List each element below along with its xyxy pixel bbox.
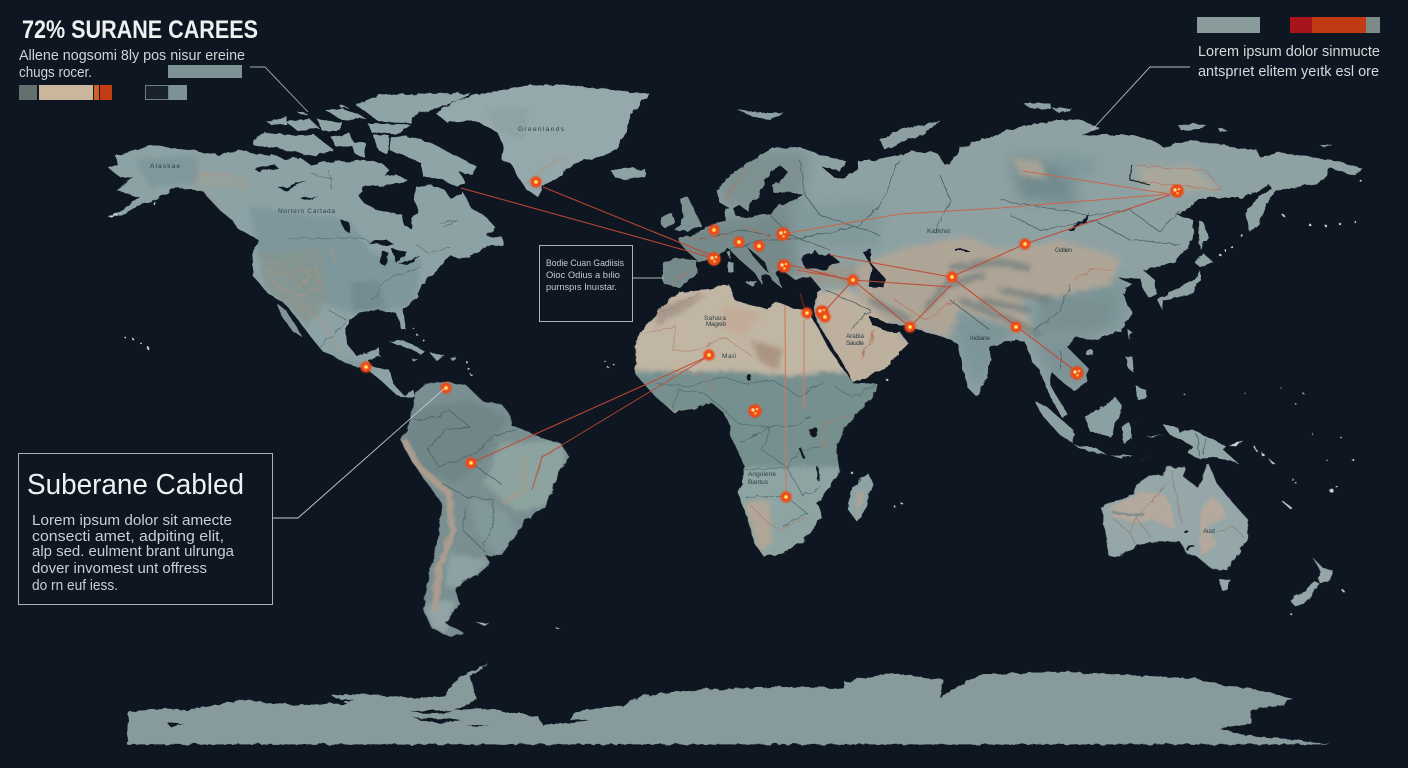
Philippines bbox=[1126, 356, 1148, 400]
leader line: note bbox=[1092, 67, 1190, 130]
map micro labels: Indiane bbox=[970, 335, 990, 342]
hotspot: Balkans bbox=[776, 258, 792, 274]
Aral and Baikal lakes bbox=[955, 165, 1150, 250]
Kuril and Aleutian chains bbox=[1219, 179, 1361, 256]
Madagascar bbox=[848, 474, 873, 522]
hotspot: Central America bbox=[360, 360, 372, 374]
hotspot: Greenland bbox=[530, 176, 542, 188]
hotspot: Siberia bbox=[1170, 184, 1184, 198]
large callout panel bbox=[18, 388, 445, 604]
Atlantic and Indian islets bbox=[556, 361, 903, 629]
panel body text: do rn euf iess. bbox=[32, 578, 118, 594]
map micro labels: Greenlands bbox=[518, 126, 565, 133]
hotspot: Mongolia bbox=[1018, 238, 1032, 250]
hotspot: France bbox=[708, 224, 720, 236]
Falkland islands bbox=[476, 622, 488, 625]
note text: antsprıet elitem yeıtk esl ore bbox=[1198, 64, 1379, 80]
landmasses bbox=[100, 84, 1370, 744]
British Isles bbox=[660, 197, 702, 232]
hotspot: Caucasus bbox=[846, 274, 860, 286]
callout text bbox=[546, 258, 624, 293]
map micro labels: Aust bbox=[1203, 528, 1215, 535]
legend swatch: grey bbox=[1197, 17, 1260, 33]
map micro labels: Alaskae bbox=[150, 163, 180, 170]
map micro labels: Nortern Cartada bbox=[278, 208, 335, 215]
legend swatch: outlined pair bbox=[146, 85, 187, 100]
subtitle: chugs rocer. bbox=[19, 65, 92, 81]
Eurasia mainland bbox=[650, 110, 1370, 430]
Oceania and Indonesia bbox=[1035, 388, 1354, 616]
small callout box bbox=[540, 246, 664, 322]
legend bar: stacked share bbox=[19, 85, 112, 100]
connection routes bbox=[461, 171, 1170, 497]
Caspian Sea bbox=[863, 250, 885, 288]
hotspot: Switzerland bbox=[732, 236, 746, 248]
Indonesian islands bbox=[1035, 397, 1163, 462]
South America bbox=[400, 381, 570, 638]
subtitle: Allene nogsomi 8ly pos nisur ereine bbox=[19, 48, 245, 64]
map micro labels: Mali bbox=[722, 353, 736, 360]
note text bbox=[1198, 44, 1380, 80]
hotspot: Gulf bbox=[904, 320, 916, 334]
hotspot: Austria bbox=[752, 240, 766, 252]
title: 72% SURANE CAREES bbox=[22, 16, 258, 44]
panel body text bbox=[32, 513, 235, 594]
Greenland bbox=[436, 84, 650, 197]
callout text: Bodie Cuan Gadiisis bbox=[546, 258, 624, 269]
map micro labels: Bantus bbox=[748, 479, 769, 486]
map micro labels: Saudie bbox=[846, 340, 864, 347]
legend swatch: grey bar bbox=[168, 65, 242, 78]
map micro labels: Magreb bbox=[706, 321, 726, 328]
Australia bbox=[1100, 464, 1248, 571]
Northern islands bbox=[737, 103, 1332, 150]
Caribbean islands bbox=[389, 340, 456, 360]
incident hotspots bbox=[360, 176, 1184, 504]
legend bar: red share bbox=[1290, 17, 1380, 33]
map micro labels: Sahara bbox=[704, 315, 726, 322]
callout frame bbox=[540, 246, 632, 322]
Mediterranean islands bbox=[727, 252, 758, 287]
hotspot: Arabia north two bbox=[818, 310, 832, 324]
map micro labels: Gobien bbox=[1055, 247, 1072, 254]
panel body text: dover invomest unt offress bbox=[32, 561, 207, 577]
hotspot: Venezuela bbox=[440, 382, 452, 394]
hotspot: Brazil bbox=[464, 456, 478, 470]
hotspot: Sahel bbox=[702, 348, 716, 362]
North America mainland bbox=[108, 145, 504, 398]
hotspot: Central Africa bbox=[748, 404, 762, 418]
small islets bbox=[107, 201, 472, 376]
Eurasia bbox=[650, 103, 1370, 430]
subtitle bbox=[19, 48, 245, 81]
note text: Lorem ipsum dolor sinmucte bbox=[1198, 44, 1380, 60]
panel body text: consecti amet, adpiting elit, bbox=[32, 529, 224, 545]
Antarctica bbox=[127, 663, 1331, 744]
leader line: callout bbox=[632, 277, 664, 279]
New Guinea bbox=[1163, 425, 1238, 463]
hotspot: Vietnam bbox=[1070, 366, 1084, 380]
callout text: Oioc Odius a bılio bbox=[546, 270, 620, 281]
Baja California bbox=[277, 303, 302, 337]
panel body text: Lorem ipsum dolor sit amecte bbox=[32, 513, 232, 529]
panel heading: Suberane Cabled bbox=[27, 469, 244, 501]
Iceland bbox=[611, 168, 646, 180]
Taiwan and Hainan bbox=[1085, 330, 1132, 356]
North America and Greenland bbox=[100, 84, 650, 407]
hotspot: Sinai bbox=[800, 306, 814, 320]
Japan and Sakhalin bbox=[1157, 220, 1213, 310]
leader line: panel bbox=[272, 388, 445, 518]
map micro labels: Kazkhst bbox=[927, 228, 950, 235]
Africa bbox=[634, 284, 878, 556]
hotspot: Riviera bbox=[706, 252, 722, 266]
panel frame bbox=[18, 454, 272, 604]
South America and Africa bbox=[380, 280, 903, 643]
leader line: title bbox=[250, 67, 308, 112]
map micro labels: Arabia bbox=[846, 333, 864, 340]
title block bbox=[19, 16, 308, 112]
Tasmania bbox=[1218, 578, 1231, 590]
hotspot: Tian Shan bbox=[946, 270, 958, 284]
map micro labels: Angolene bbox=[748, 471, 776, 478]
Black Sea bbox=[800, 250, 840, 270]
New Zealand bbox=[1291, 558, 1333, 606]
hotspot: Southern Africa bbox=[780, 490, 792, 504]
hotspot: Ukraine bbox=[776, 226, 790, 242]
Pacific islets bbox=[1183, 388, 1354, 616]
hotspot: Himalaya bbox=[1010, 320, 1022, 334]
callout text: purnspıs Inuıstar. bbox=[546, 282, 617, 293]
hotspot: Arabia north bbox=[814, 304, 830, 320]
map micro labels bbox=[150, 126, 1215, 535]
top right note bbox=[1092, 17, 1380, 130]
Arctic archipelago bbox=[254, 93, 477, 187]
panel body text: alp sed. eulment brant ulrunga bbox=[32, 544, 235, 560]
